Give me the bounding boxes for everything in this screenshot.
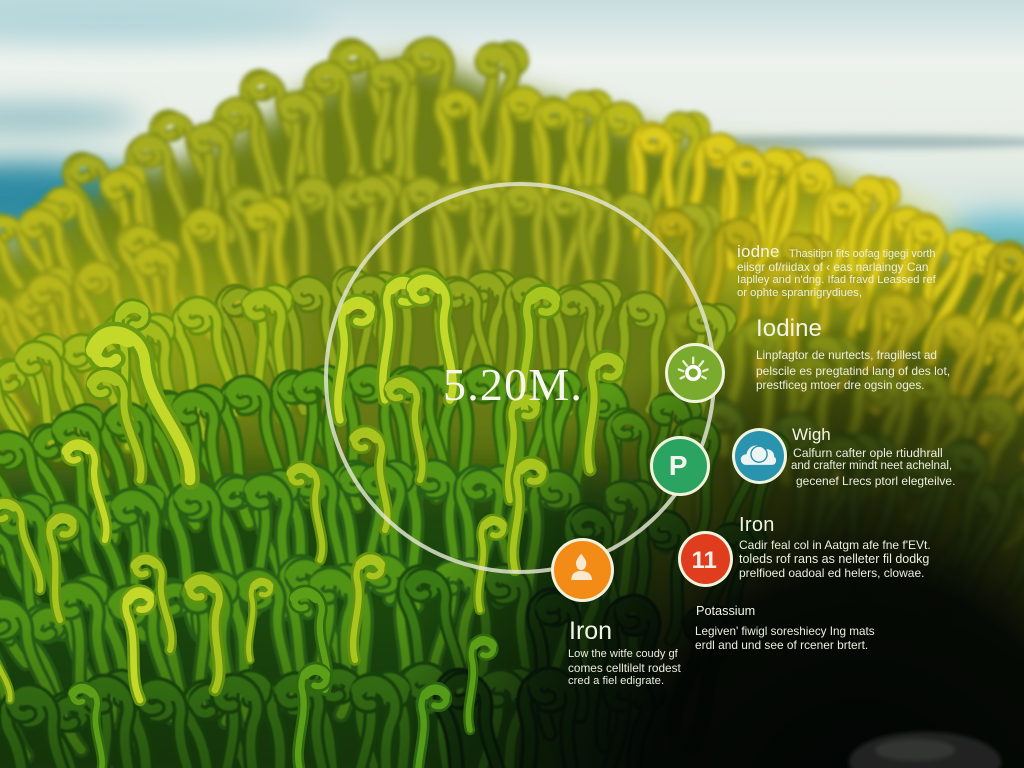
sky and sea [0, 0, 1024, 300]
body lines [695, 625, 875, 652]
note lines: or ophte spranrigrydiues, [737, 287, 862, 299]
icon: green sun eye [665, 343, 725, 403]
text block: Iodine [756, 315, 950, 392]
body lines: and crafter mindt neet achelnal, [791, 460, 952, 472]
heading: Wigh: Wigh [792, 425, 831, 444]
body lines [568, 648, 681, 687]
right side strands, out of focus [642, 257, 1024, 650]
body lines: erdl and und see of rcener brtert. [695, 638, 868, 652]
body lines [739, 538, 931, 580]
heading: Potassium: Potassium [696, 604, 755, 618]
icon: red number badge: 11 [691, 547, 717, 574]
body lines [756, 348, 950, 392]
body lines: Low the witfe coudy gf [568, 648, 678, 660]
text block: Wigh [791, 425, 955, 488]
icon: teal cloud [732, 428, 787, 484]
body lines: prelfioed oadoal ed helers, clowae. [739, 566, 924, 580]
text block: Iron right [739, 514, 931, 580]
body lines: Cadir feal col in Aatgm afe fne f'EVt. [739, 538, 931, 552]
icon: P badge: P [669, 450, 688, 481]
heading: Iodine: Iodine [756, 315, 822, 342]
mid strands [0, 270, 789, 768]
body lines: Legiven' fiwigl soreshiecy Ing mats [695, 625, 875, 638]
heading: Iron: Iron [739, 514, 775, 536]
note lines: eiisgr of/riidax of ‹ eas narlaingy Can [737, 260, 928, 274]
icon: orange drop and base [551, 538, 614, 602]
body lines: Calfurn cafter ople rtiudhrall [793, 446, 943, 460]
body lines [791, 446, 955, 488]
body lines: comes celltilelt rodest [568, 661, 681, 675]
center value: 5.20M. [443, 359, 583, 410]
heading: Iron: Iron [569, 617, 612, 645]
icon: P badge [650, 436, 710, 496]
body lines: prestficeg mtoer dre ogsin oges. [756, 378, 925, 392]
large ring [326, 184, 714, 572]
body lines: cred a fiel edigrate. [568, 675, 664, 687]
heading: iodne: iodne [737, 242, 780, 261]
note lines: Thasitipn fits oofag tigegi vorth [789, 248, 935, 260]
text block: Potassium [695, 604, 875, 652]
text block: iodne note [737, 242, 936, 299]
text block: Iron lower [568, 617, 681, 687]
rock at bottom right [849, 732, 1001, 768]
front bright strands [0, 278, 619, 768]
body lines: gecenef Lrecs ptorl elegteilve. [796, 474, 955, 488]
note lines: Iaplley and n'dng. Ifad fravd Leassed ref [737, 274, 936, 286]
icon: red number badge [678, 531, 733, 587]
body lines: toleds rof rans as nelleter fil dodkg [739, 552, 929, 566]
body lines: Linpfagtor de nurtects, fragillest ad [756, 348, 937, 362]
far strands (blurred) [0, 42, 1024, 451]
body lines: pelscile es pregtatind lang of des lot, [756, 364, 950, 378]
note lines [737, 248, 936, 299]
